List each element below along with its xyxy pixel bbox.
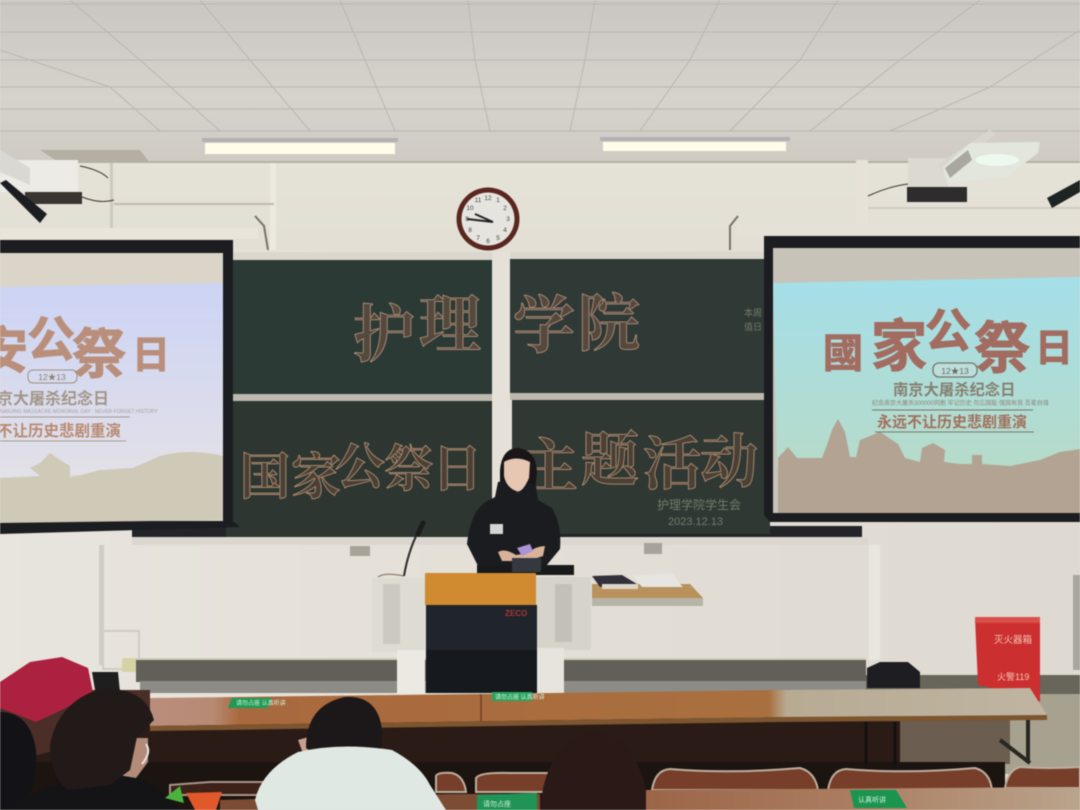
left projection screen: 不让历史悲剧重演 (0, 421, 121, 440)
left projection screen: 12★13 (38, 372, 66, 382)
fire extinguisher box: 灭火器箱 (994, 634, 1032, 646)
upper wall trim (110, 160, 1080, 250)
origami paper (165, 786, 222, 810)
left projection screen: NANJING MASSACRE MEMORIAL DAY · NEVER FORGET HISTORY (0, 409, 158, 415)
right projection screen (764, 236, 1080, 522)
under table shadow (0, 690, 1010, 810)
chalk heading: 国家公祭日: 家 (291, 449, 341, 505)
podium: ZECO (505, 609, 527, 618)
slide small line: 纪念南京大屠杀300000同胞 牢记历史 勿忘国耻 强国有我 吾辈自强 (872, 399, 1049, 407)
chalk heading: 主题活动: 动 (700, 430, 758, 495)
chalk signature: 本周 (744, 307, 762, 318)
coat (6, 773, 180, 810)
chalk heading: 护理学院: 学 (513, 292, 575, 361)
laptop (477, 558, 574, 575)
wall clock: 1 (496, 197, 500, 204)
lower wall conduit (99, 543, 1080, 672)
slide skyline (778, 419, 1080, 513)
chalk signature (657, 307, 762, 528)
audience member far left (0, 712, 36, 810)
audience member with glasses (6, 689, 180, 810)
chalk heading: 国家公祭日: 国 (240, 449, 290, 505)
row of seats (170, 767, 1080, 795)
slide title (823, 305, 1073, 380)
hair (306, 697, 382, 758)
green notices on rear desk: 请勿占座 (483, 799, 511, 808)
speaker hands and paper (498, 546, 545, 561)
face (118, 738, 148, 778)
speaker hair (500, 448, 537, 492)
audience member front centre (540, 733, 646, 810)
chalk heading: 主题活动: 题 (581, 428, 639, 493)
rear desk row (220, 787, 1080, 810)
chalk heading: 主题活动: 活 (643, 432, 701, 497)
wall clock: 10 (466, 205, 474, 212)
chalk signature: 值日 (744, 321, 762, 332)
wall clock: 5 (496, 235, 500, 242)
red backpack (0, 657, 93, 722)
chalk signature: 护理学院学生会 (657, 497, 741, 512)
chalk heading: 国家公祭日: 祭 (384, 441, 434, 497)
audience member in white jacket (255, 697, 446, 810)
blackboard panels (226, 252, 772, 537)
jacket (255, 746, 446, 810)
chalk signature: 2023.12.13 (668, 516, 723, 528)
blackboard frame (132, 252, 868, 545)
slide date badge: 12★13 (941, 366, 969, 376)
wall clock: 8 (468, 227, 472, 234)
slide title: 祭 (974, 317, 1030, 380)
slide title: 國 (823, 332, 863, 376)
ceiling light right (600, 137, 790, 151)
chalk heading: 国家公祭日: 公 (335, 439, 385, 495)
speaker jacket (467, 480, 560, 566)
slide title: 公 (925, 305, 971, 357)
left projection screen: 公 (27, 314, 75, 367)
left projection screen (0, 240, 240, 534)
chalk heading: 护理学院: 护 (353, 301, 415, 370)
front table (150, 688, 1047, 765)
left projection screen: 祭 (72, 325, 126, 385)
projector right (868, 130, 1080, 208)
green place cards (228, 692, 545, 708)
podium (372, 573, 591, 694)
mask strap (142, 744, 148, 764)
chalk heading: 国家公祭日 (240, 439, 482, 505)
chalk heading: 护理学院: 院 (578, 290, 640, 359)
green notices on rear desk (477, 790, 907, 810)
wall clock (456, 188, 520, 250)
screen rail left (0, 216, 268, 250)
green place cards: 请勿占座 认真听讲 (236, 699, 286, 707)
wall clock: 3 (506, 216, 510, 223)
wall clock: 4 (503, 227, 507, 234)
projector left (0, 150, 114, 223)
wall clock: 6 (486, 238, 490, 245)
wall clock: 7 (476, 235, 480, 242)
wall clock: 12 (484, 195, 492, 202)
floor (780, 694, 1080, 774)
face (298, 736, 316, 756)
slide date badge (933, 363, 977, 377)
ceiling light left (202, 138, 398, 154)
dark bag beside backpack (92, 672, 120, 696)
left projection screen: 京大屠杀纪念日 (0, 389, 109, 408)
speaker face (504, 458, 530, 491)
chalk heading: 主题活动: 主 (520, 434, 578, 499)
ceiling (0, 0, 1080, 163)
chalk heading: 护理学院: 理 (419, 291, 481, 360)
slide title: 日 (1035, 328, 1073, 370)
fire extinguisher box (975, 617, 1040, 702)
side shelf with books (592, 573, 703, 606)
black bag on floor (867, 662, 920, 688)
wall clock: 9 (465, 216, 469, 223)
wall clock: 2 (503, 205, 507, 212)
slide subtitle: 南京大屠杀纪念日 (893, 381, 1015, 399)
green place cards: 请勿占座 认真听讲 (495, 693, 545, 701)
speaker name badge (490, 524, 503, 534)
chalk heading: 护理学院 (353, 290, 640, 370)
chalk heading: 国家公祭日: 日 (432, 441, 482, 497)
wall skirting (136, 658, 1080, 695)
fire extinguisher box: 火警119 (997, 671, 1029, 682)
green notices on rear desk: 认真听讲 (858, 795, 886, 804)
chalk heading: 主题活动 (520, 428, 758, 499)
slide slogan: 永远不让历史悲剧重演 (877, 413, 1027, 431)
slide title: 家 (871, 315, 927, 378)
speaker (467, 448, 560, 566)
left projection screen: 日 (132, 335, 170, 377)
microphone (378, 523, 423, 577)
hair (50, 689, 154, 790)
screen rail right (730, 216, 1080, 250)
wall clock: 11 (475, 197, 482, 204)
